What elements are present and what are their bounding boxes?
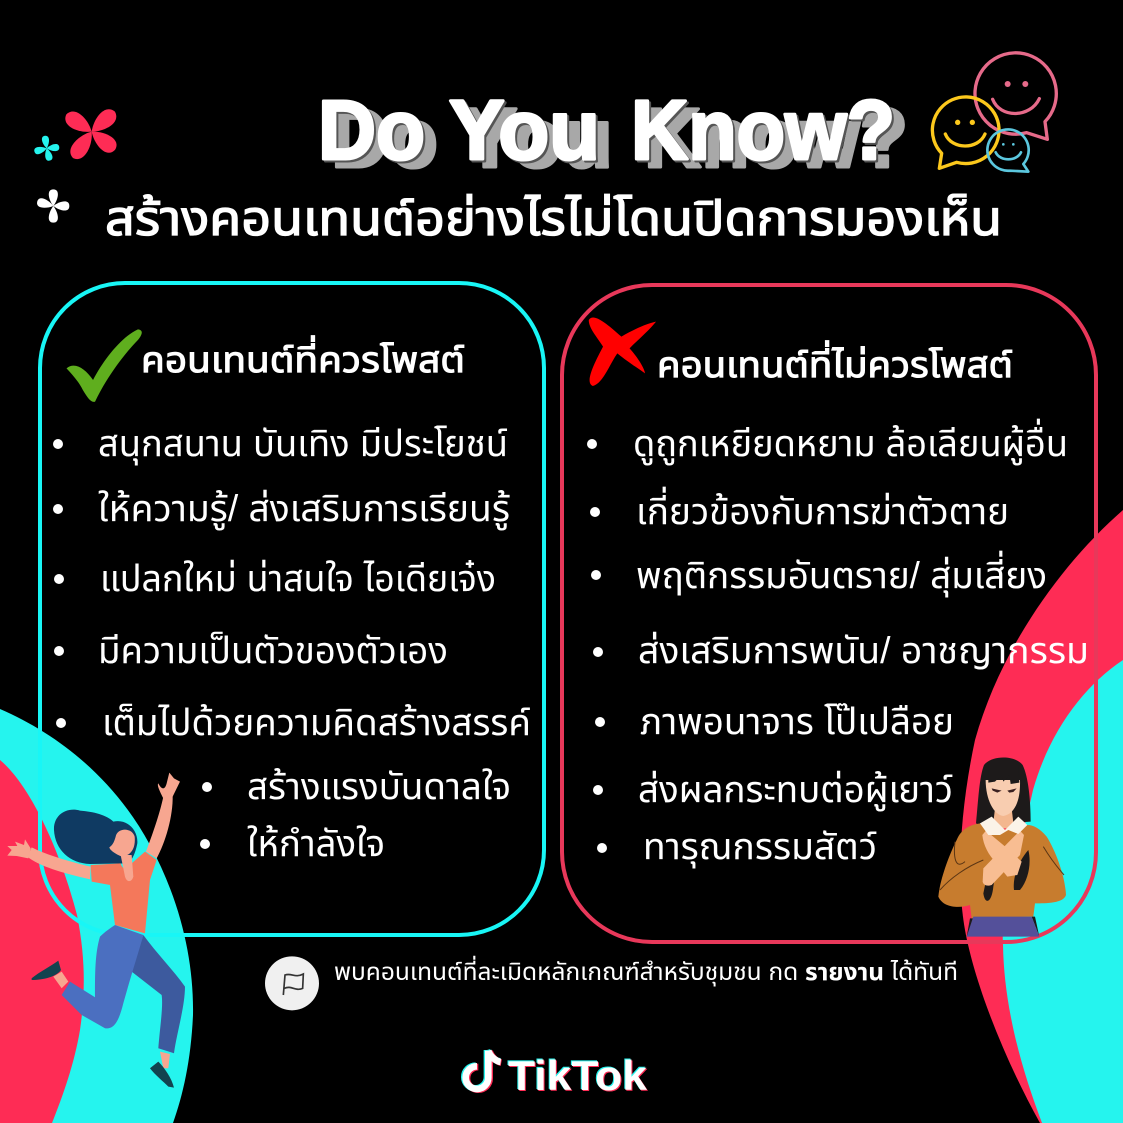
- logo: TikTok: TikTok: [509, 1053, 649, 1100]
- list: should post: ให้กำลังใจ: [247, 823, 385, 864]
- right red shape: [960, 510, 1123, 1123]
- panel: should post outline: [40, 283, 544, 935]
- heading: should post: คอนเทนต์ที่ควรโพสต์: [141, 335, 465, 380]
- icon: smiley chat bubbles: [932, 53, 1056, 172]
- illustration: woman crossing arms: [938, 757, 1066, 937]
- list: should not post: ทารุณกรรมสัตว์: [643, 826, 877, 869]
- list: should post: มีความเป็นตัวของตัวเอง: [98, 630, 448, 671]
- bottom-left red shape: [0, 760, 84, 1123]
- list: should post: [53, 423, 531, 864]
- logo: TikTok: TikTok: [507, 1051, 647, 1098]
- footer note: พบคอนเทนต์ที่ละเมิดหลักเกณฑ์สำหรับชุมชน กด รายงาน ได้ทันที: [334, 955, 958, 987]
- illustration: jumping woman: [7, 773, 185, 1088]
- title: Do: [318, 83, 425, 177]
- list: should post: เต็มไปด้วยความคิดสร้างสรรค์: [102, 702, 531, 743]
- list: should not post: ภาพอนาจาร โป๊เปลือย: [640, 701, 954, 742]
- heading: should not post: คอนเทนต์ที่ไม่ควรโพสต์: [657, 340, 1013, 385]
- list: should post: แปลกใหม่ น่าสนใจ ไอเดียเจ๋ง: [100, 558, 496, 599]
- bottom-left cyan shape: [0, 709, 193, 1123]
- title: Do: [331, 91, 438, 185]
- panel: should not post outline: [562, 285, 1096, 942]
- title: Do: [320, 85, 427, 179]
- title: [318, 83, 908, 185]
- list: should post: สนุกสนาน บันเทิง มีประโยชน์: [98, 423, 508, 466]
- list: should not post: ดูถูกเหยียดหยาม ล้อเลียนผู้อื่น: [633, 418, 1068, 466]
- list: should not post: [587, 418, 1089, 869]
- list: should not post: ส่งผลกระทบต่อผู้เยาว์: [638, 769, 953, 812]
- icon: report flag: [265, 956, 319, 1010]
- icon: red cross: [589, 317, 656, 386]
- list: should post: สร้างแรงบันดาลใจ: [247, 766, 511, 807]
- logo: TikTok: TikTok: [508, 1052, 648, 1099]
- list: should post: ให้ความรู้/ ส่งเสริมการเรียนรู้: [98, 488, 510, 531]
- icon: red flower: [62, 105, 120, 163]
- title: You: [451, 85, 602, 179]
- title: Know?: [644, 91, 908, 185]
- title: You: [449, 83, 600, 177]
- title: You: [462, 91, 613, 185]
- icon: green check mark: [67, 329, 142, 402]
- list: should not post: เกี่ยวข้องกับการฆ่าตัวตาย: [636, 486, 1009, 532]
- title: Know?: [631, 83, 895, 177]
- title: Know?: [633, 85, 897, 179]
- subtitle: สร้างคอนเทนต์อย่างไรไม่โดนปิดการมองเห็น: [105, 193, 1002, 246]
- logo: TikTok: [464, 1050, 649, 1100]
- icon: cyan flower: [34, 135, 60, 161]
- right cyan shape: [1003, 660, 1123, 1123]
- list: should not post: ส่งเสริมการพนัน/ อาชญากรรม: [638, 630, 1089, 671]
- icon: white flower: [36, 189, 69, 223]
- list: should not post: พฤติกรรมอันตราย/ สุ่มเสี่ยง: [636, 550, 1047, 598]
